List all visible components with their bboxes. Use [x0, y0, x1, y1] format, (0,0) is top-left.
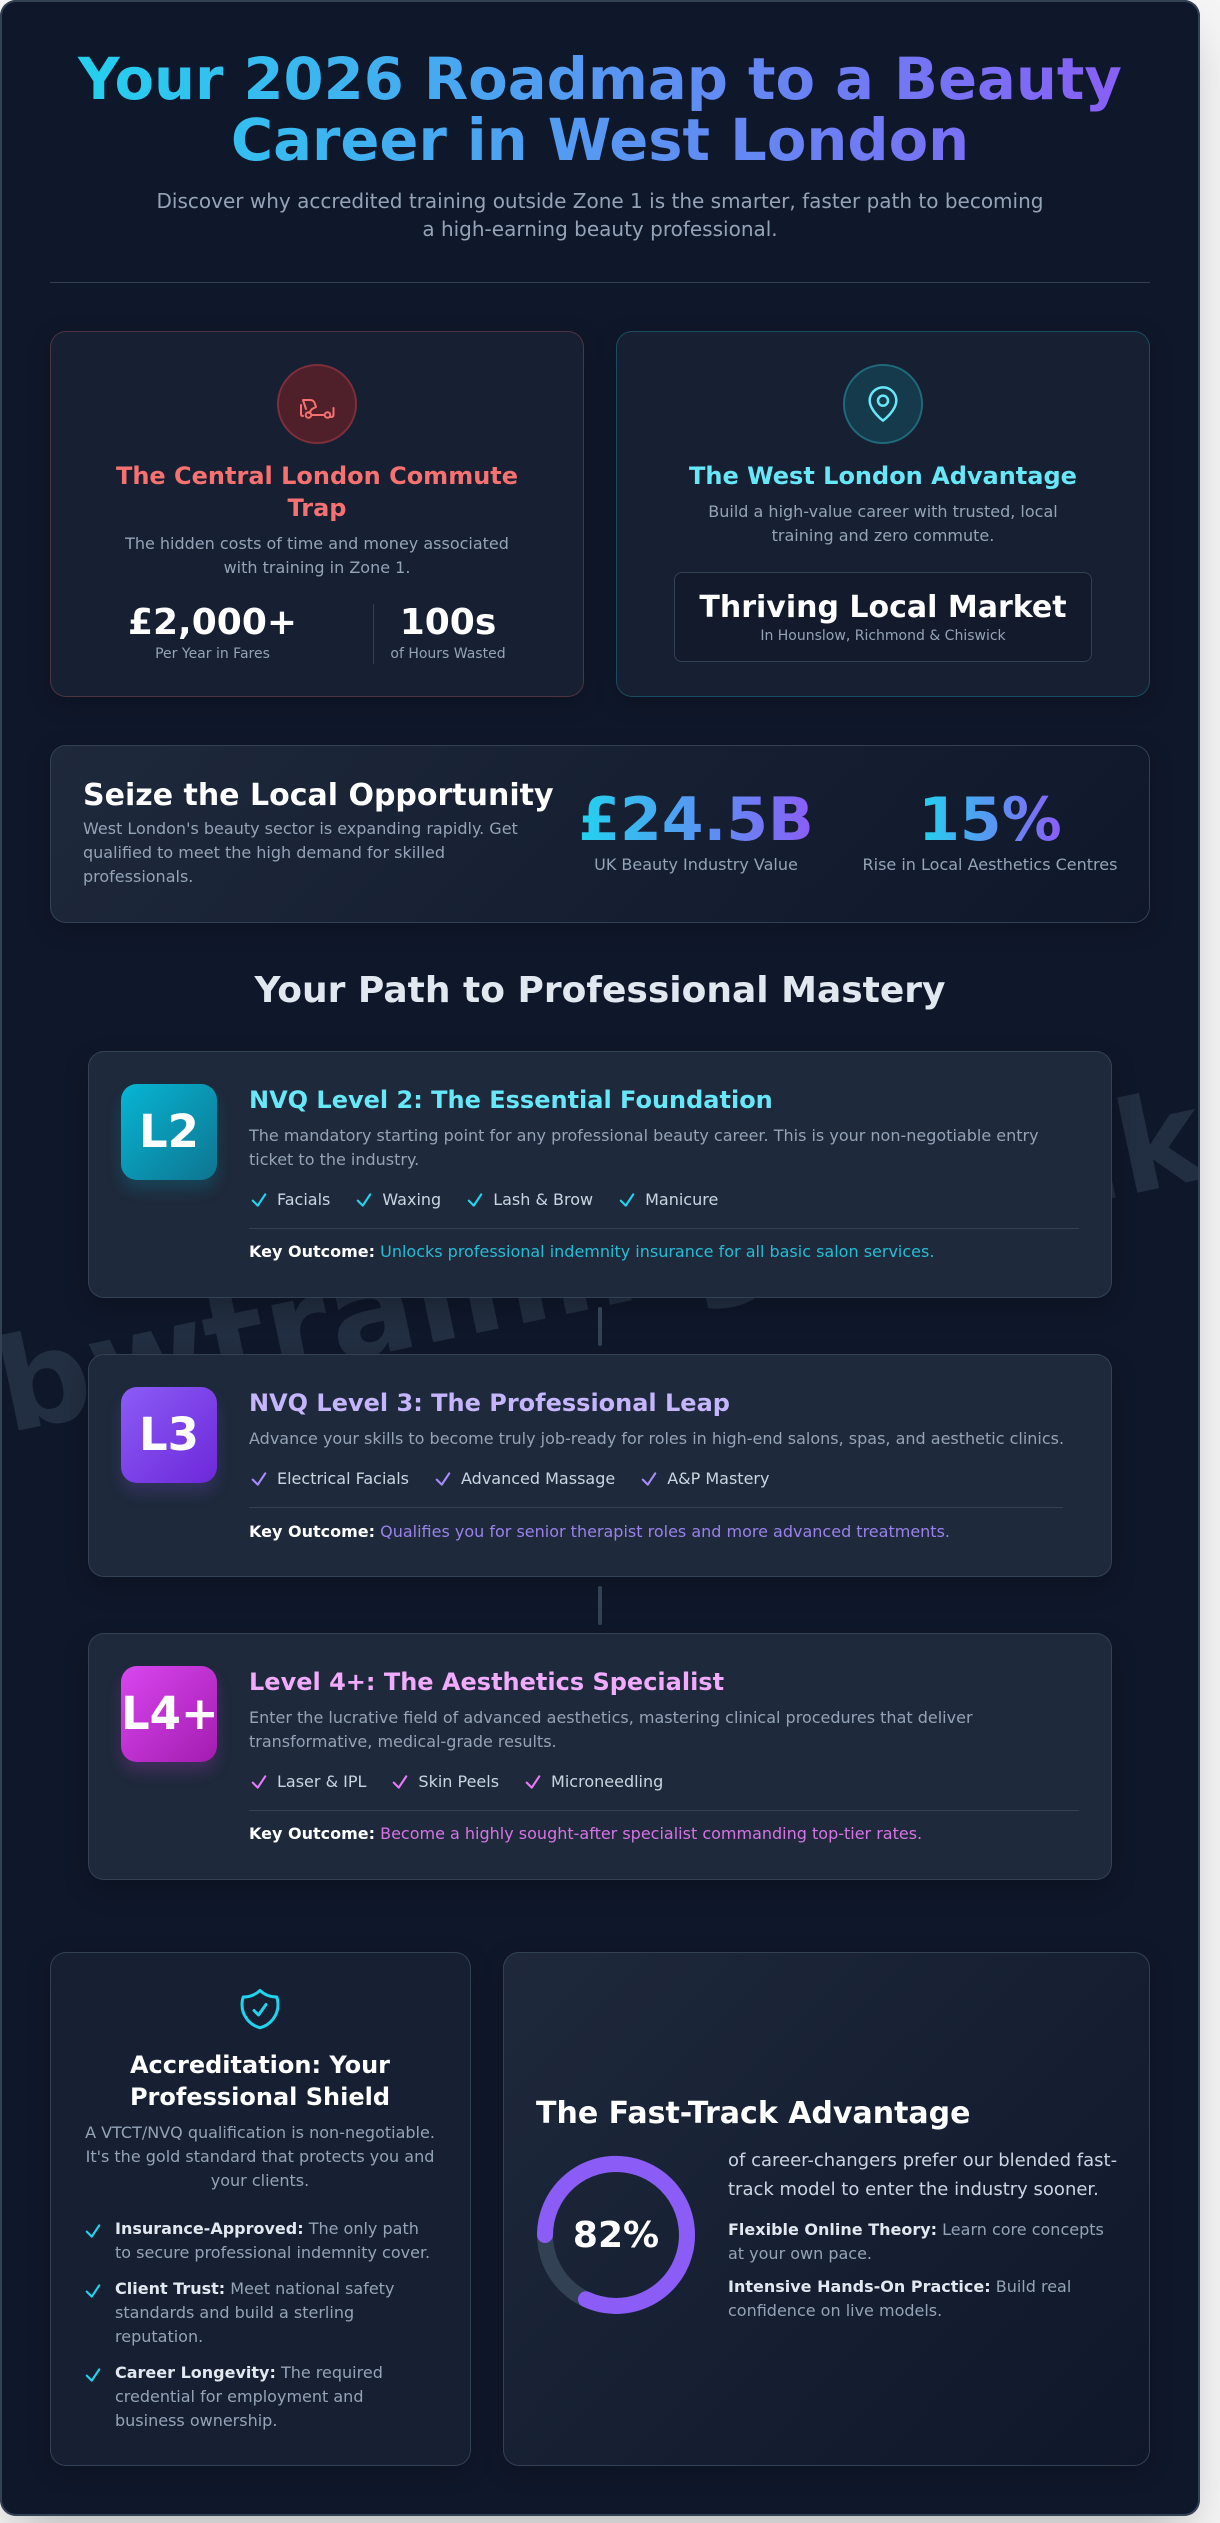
point: online theory: at your own pace. [728, 2244, 872, 2263]
stat: fares: £2,000+ [128, 602, 297, 643]
skills list [252, 1469, 769, 1488]
badge: L4+: L4+ [121, 1687, 219, 1740]
benefit: career longevity: business ownership. [115, 2410, 277, 2430]
skills list [252, 1772, 663, 1791]
callout: thriving local market [674, 572, 1092, 662]
skills list: Electrical Facials [277, 1469, 409, 1488]
benefit: insurance: to secure professional indemnity cover. [115, 2243, 430, 2262]
heading: The West London Advantage [689, 462, 1077, 490]
level description: transformative, medical-grade results. [249, 1732, 557, 1751]
subtitle: Discover why accredited training outside Zone 1 is the smarter, faster path to becoming [157, 188, 1043, 212]
point: online theory [728, 2220, 1104, 2263]
panel: seize the local opportunity [50, 745, 1150, 923]
stat: local centres: Rise in Local Aesthetics Centres [863, 855, 1117, 874]
benefit: career longevity [86, 2362, 383, 2430]
level description: Enter the lucrative field of advanced aesthetics, mastering clinical procedures that deliver [249, 1708, 973, 1727]
key outcome: Key Outcome: Become a highly sought-after specialist commanding top-tier rates. [249, 1824, 922, 1843]
key outcome: Key Outcome: Unlocks professional indemnity insurance for all basic salon services. [249, 1242, 934, 1261]
heading [116, 462, 518, 522]
benefit: client trust: reputation. [115, 2326, 203, 2346]
description: with training in Zone 1. [224, 558, 410, 577]
level description: ticket to the industry. [249, 1150, 419, 1169]
benefit: insurance [86, 2219, 430, 2262]
point: hands-on practice [728, 2276, 1071, 2320]
point: hands-on practice: confidence on live models. [728, 2300, 942, 2320]
panel: west london advantage [616, 331, 1150, 697]
skills list: Skin Peels [418, 1772, 499, 1791]
skills list: Waxing [382, 1190, 441, 1209]
benefit: client trust: standards and build a sterling [115, 2302, 354, 2322]
heading: Accreditation: Your [130, 2051, 390, 2079]
description: It's the gold standard that protects you and [86, 2146, 434, 2166]
description: professionals. [83, 867, 193, 886]
skills list: Laser & IPL [277, 1772, 366, 1791]
heading: The Fast-Track Advantage [536, 2096, 970, 2130]
skills list: Facials [277, 1190, 330, 1209]
point: hands-on practice: Intensive Hands-On Practice: Build real [728, 2276, 1071, 2296]
key outcome: Key Outcome: Qualifies you for senior therapist roles and more advanced treatments. [249, 1522, 950, 1541]
level description: The mandatory starting point for any professional beauty career. This is your non-negotiable entry [249, 1126, 1039, 1145]
watermark: bwtraining.co.uk [0, 1062, 1200, 1463]
badge: L2 [121, 1084, 217, 1180]
level title: Level 4+: The Aesthetics Specialist [249, 1668, 724, 1696]
stat: hours: 100s [400, 602, 496, 643]
title: Your 2026 Roadmap to a Beauty [78, 46, 1122, 113]
connector [598, 1307, 602, 1346]
card: level 2 [88, 1051, 1112, 1298]
section heading: Your Path to Professional Mastery [254, 970, 946, 1010]
title [50, 50, 1150, 171]
badge: L2: L2 [139, 1105, 199, 1158]
stat: hours [390, 602, 506, 662]
stat: local centres [863, 785, 1117, 874]
description [708, 502, 1058, 544]
skills list: A&P Mastery [667, 1469, 769, 1488]
badge: L4+ [121, 1666, 217, 1762]
description: training and zero commute. [772, 526, 994, 544]
benefit: insurance: Insurance-Approved: The only path [115, 2219, 419, 2238]
icon: map pin [843, 364, 923, 444]
level description [249, 1708, 973, 1751]
level title: NVQ Level 3: The Professional Leap [249, 1389, 730, 1417]
heading: Professional Shield [130, 2083, 390, 2111]
stat: hours: of Hours Wasted [390, 646, 506, 662]
heading [130, 2051, 390, 2111]
callout: thriving local market: Thriving Local Market [699, 590, 1067, 624]
heading: The Central London Commute [116, 462, 518, 490]
panel: central london commute trap [50, 331, 584, 697]
skills list [252, 1190, 718, 1209]
benefit: client trust: Client Trust: Meet national safety [115, 2278, 394, 2298]
badge: L3 [121, 1387, 217, 1483]
heading: Trap [288, 494, 346, 522]
skills list: Advanced Massage [461, 1469, 615, 1488]
title: Career in West London [231, 106, 969, 174]
donut chart: 82%: 82% [573, 2215, 659, 2256]
description: West London's beauty sector is expanding rapidly. Get [83, 819, 518, 838]
badge: L3: L3 [139, 1408, 199, 1461]
card: level 3 [88, 1354, 1112, 1577]
description: your clients. [211, 2170, 309, 2190]
description: A VTCT/NVQ qualification is non-negotiable. [85, 2122, 435, 2142]
description: qualified to meet the high demand for skilled [83, 843, 445, 862]
stat: industry value: UK Beauty Industry Value [594, 855, 798, 874]
subtitle: a high-earning beauty professional. [422, 216, 778, 240]
skills list: Microneedling [551, 1772, 663, 1791]
panel: fast-track advantage [503, 1952, 1150, 2466]
connector [598, 1586, 602, 1625]
point: online theory: Flexible Online Theory: Learn core concepts [728, 2220, 1104, 2239]
level description: Advance your skills to become truly job-ready for roles in high-end salons, spas, and aesthetic clinics. [249, 1429, 1064, 1448]
description [125, 534, 509, 577]
description [83, 819, 518, 886]
description: Build a high-value career with trusted, local [708, 502, 1058, 520]
benefit: career longevity: Career Longevity: The required [115, 2362, 383, 2382]
heading: Seize the Local Opportunity [83, 778, 554, 812]
benefit: career longevity: credential for employment and [115, 2386, 363, 2406]
subtitle [157, 188, 1043, 240]
level description [248, 1126, 1039, 1169]
stat: industry value: £24.5B [578, 785, 814, 855]
icon: shield check [240, 1988, 280, 2030]
panel: accreditation [50, 1952, 471, 2466]
skills list: Lash & Brow [493, 1190, 593, 1209]
description: The hidden costs of time and money associated [125, 534, 509, 553]
stat: fares [128, 602, 297, 662]
donut chart: 82% [537, 2156, 695, 2314]
benefit: client trust [86, 2278, 394, 2346]
lead text: of career-changers prefer our blended fast- [728, 2150, 1117, 2171]
description [85, 2122, 435, 2190]
icon: commute vehicle [277, 364, 357, 444]
callout: thriving local market: In Hounslow, Richmond & Chiswick [760, 628, 1006, 644]
stat: local centres: 15% [918, 785, 1062, 855]
skills list: Manicure [645, 1190, 718, 1209]
lead text [728, 2150, 1117, 2200]
stat: fares: Per Year in Fares [155, 646, 270, 662]
level title: NVQ Level 2: The Essential Foundation [249, 1086, 773, 1114]
card: level 4 [88, 1633, 1112, 1880]
lead text: track model to enter the industry sooner. [728, 2179, 1099, 2200]
